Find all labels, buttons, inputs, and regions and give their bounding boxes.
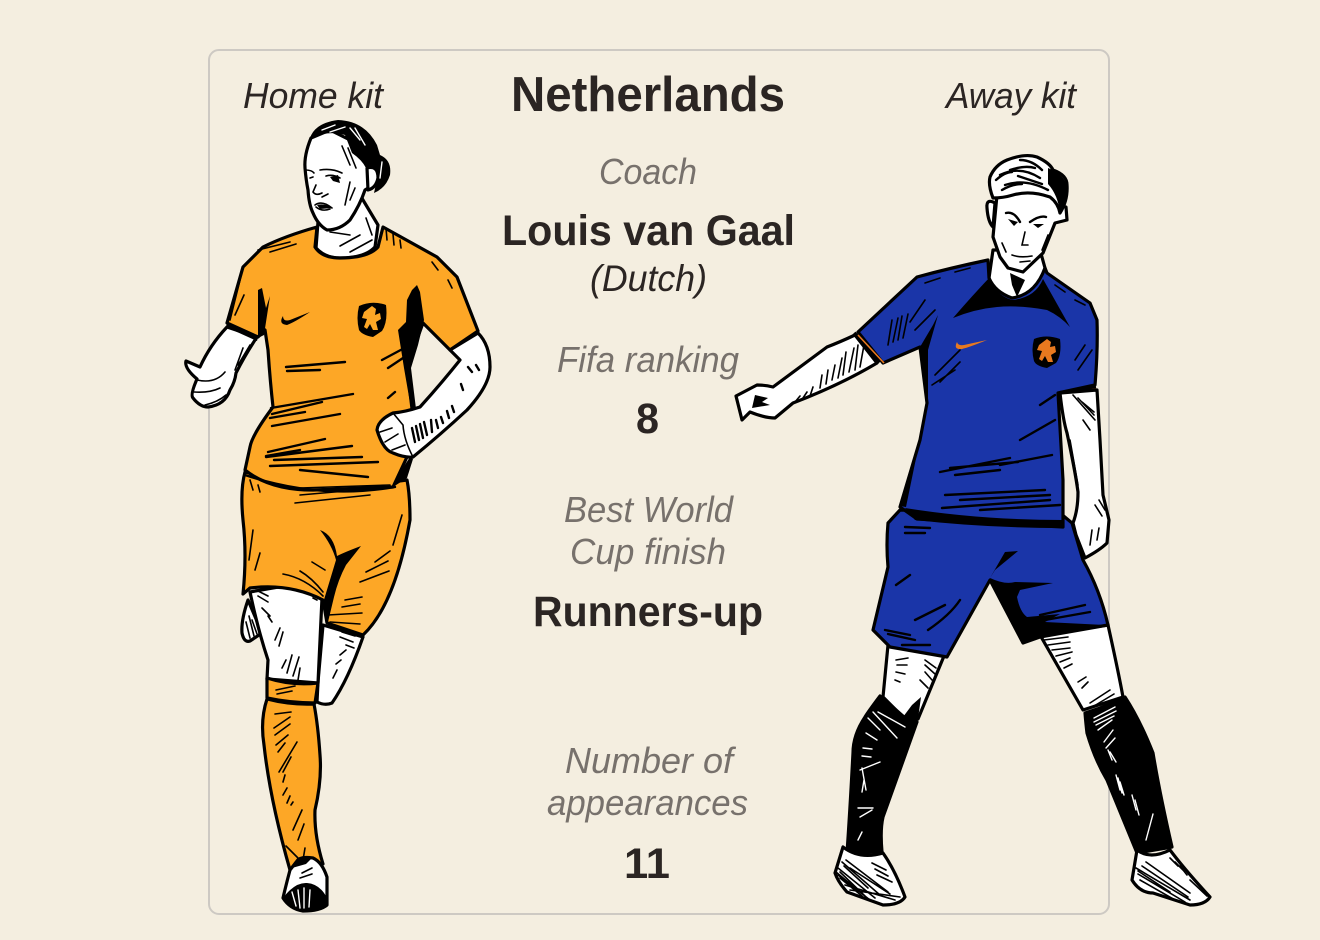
text block: fifa ranking: Fifa ranking [557,339,739,380]
text block: coach: (Dutch) [590,258,707,299]
back leg [317,625,363,704]
sock hatching [274,686,304,840]
boot [283,857,327,911]
head [993,188,1067,272]
front thigh [250,585,322,683]
boot left [835,847,905,905]
arm right [1060,390,1109,558]
arm left [186,327,257,407]
text block: number of appearances [547,740,748,888]
title: Netherlands: Netherlands [511,68,785,122]
hair [989,156,1067,213]
crest [358,303,386,337]
text block: best world cup finish [533,489,763,636]
head [305,130,378,230]
text block: fifa ranking [557,339,739,443]
sock left [847,696,917,853]
sock right [1085,697,1172,853]
shirt [227,227,478,490]
shorts [242,472,410,635]
arm right [377,333,490,457]
text block: number of appearances: 11 [624,840,670,888]
neck [316,195,378,258]
thigh left [883,645,944,719]
text block: best world cup finish: Runners-up [533,588,763,636]
shorts [873,510,1108,657]
swoosh [956,340,987,349]
neck [989,250,1045,300]
arm left [736,335,877,420]
text block: fifa ranking: 8 [636,395,659,443]
face lines [305,146,356,210]
sock [267,678,318,703]
face lines [1006,213,1046,222]
text block: coach: Louis van Gaal [502,207,795,255]
text block: number of appearances: Number of [565,740,737,781]
text block: coach: Coach [599,151,697,192]
label: home kit: Home kit [243,75,385,116]
illustration: away kit player [736,156,1210,905]
illustration: home kit player [186,120,490,911]
shirt [858,260,1097,527]
text block: best world cup finish: Cup finish [570,531,726,572]
sleeve cuffs [854,333,880,362]
text block: number of appearances: appearances [547,782,748,823]
hair [310,120,390,193]
swoosh [281,312,310,325]
thigh right [1040,625,1123,710]
text block: best world cup finish: Best World [564,489,734,530]
crest [1032,336,1060,368]
boot right [1132,850,1210,905]
label: away kit: Away kit [944,75,1078,116]
text block: coach [502,151,795,299]
panel: card frame [209,50,1109,914]
